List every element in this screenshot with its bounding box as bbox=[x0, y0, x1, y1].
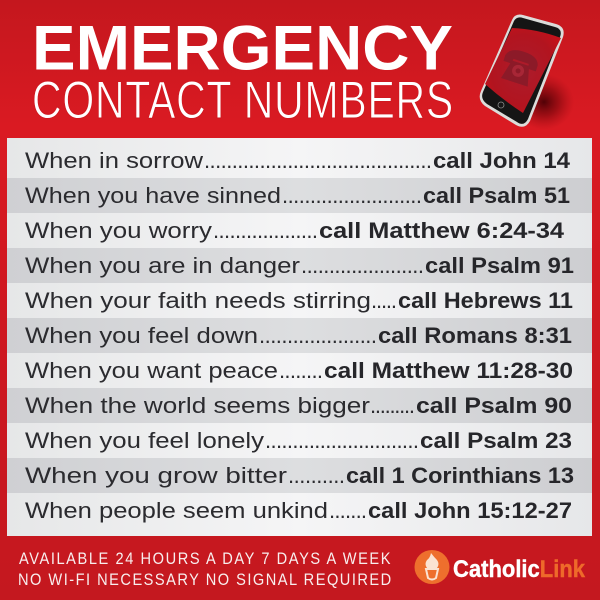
heading: contact numbers: CONTACT NUMBERS bbox=[32, 70, 453, 129]
row: down bbox=[7, 318, 592, 353]
row: peace: ........ bbox=[279, 358, 323, 383]
title bbox=[32, 14, 453, 129]
row: peace: When you want peace bbox=[25, 358, 278, 383]
row: peace bbox=[7, 353, 592, 388]
row: down: When you feel down bbox=[25, 323, 258, 348]
row: faith: call Hebrews 11 bbox=[398, 288, 573, 313]
icon: home button bbox=[498, 102, 504, 108]
row: world bbox=[7, 388, 592, 423]
row: world: call Psalm 90 bbox=[416, 393, 572, 418]
panel: contact list bbox=[7, 138, 592, 536]
row: down: call Romans 8:31 bbox=[378, 323, 572, 348]
row: world: ......... bbox=[370, 393, 415, 418]
row: lonely bbox=[7, 423, 592, 458]
row: worry bbox=[7, 213, 592, 248]
row: faith: ..... bbox=[371, 288, 397, 313]
row: down: ..................... bbox=[259, 323, 377, 348]
row: danger: When you are in danger bbox=[25, 253, 300, 278]
row: sinned: ......................... bbox=[282, 183, 422, 208]
row: bitter: call 1 Corinthians 13 bbox=[346, 463, 574, 488]
heading: emergency: EMERGENCY bbox=[32, 14, 453, 84]
row: danger bbox=[7, 248, 592, 283]
row: bitter: .......... bbox=[288, 463, 345, 488]
footer text bbox=[18, 550, 391, 589]
row: sinned: When you have sinned bbox=[25, 183, 281, 208]
icon: smartphone bbox=[480, 15, 574, 130]
row: bitter bbox=[7, 458, 592, 493]
row: sinned: call Psalm 51 bbox=[423, 183, 570, 208]
row: worry: ................... bbox=[213, 218, 318, 243]
footer text: AVAILABLE 24 HOURS A DAY 7 DAYS A WEEK bbox=[19, 550, 391, 568]
row: worry: When you worry bbox=[25, 218, 212, 243]
footer text: NO WI-FI NECESSARY NO SIGNAL REQUIRED bbox=[18, 571, 391, 589]
row: sorrow: When in sorrow bbox=[25, 148, 203, 173]
row: unkind: ....... bbox=[329, 498, 367, 523]
row: sorrow: ......................................... bbox=[204, 148, 432, 173]
row: peace: call Matthew 11:28-30 bbox=[324, 358, 573, 383]
row: faith: When your faith needs stirring bbox=[25, 288, 371, 313]
row: danger: call Psalm 91 bbox=[425, 253, 574, 278]
row: unkind bbox=[7, 493, 592, 536]
row: lonely: call Psalm 23 bbox=[420, 428, 572, 453]
row: unkind: When people seem unkind bbox=[25, 498, 328, 523]
row: worry: call Matthew 6:24-34 bbox=[319, 218, 565, 243]
icon: telephone on screen bbox=[498, 47, 540, 88]
row: lonely: When you feel lonely bbox=[25, 428, 264, 453]
row: unkind: call John 15:12-27 bbox=[368, 498, 572, 523]
logo: CatholicLink bbox=[414, 550, 586, 584]
icon: flame badge bbox=[414, 550, 450, 584]
row: danger: ...................... bbox=[301, 253, 424, 278]
row: sorrow bbox=[7, 138, 592, 178]
logo wordmark: CatholicLink bbox=[453, 556, 586, 583]
row: faith bbox=[7, 283, 592, 318]
row: lonely: ............................ bbox=[265, 428, 419, 453]
row: bitter: When you grow bitter bbox=[25, 463, 287, 488]
row: sorrow: call John 14 bbox=[433, 148, 571, 173]
row: world: When the world seems bigger bbox=[25, 393, 370, 418]
row: sinned bbox=[7, 178, 592, 213]
